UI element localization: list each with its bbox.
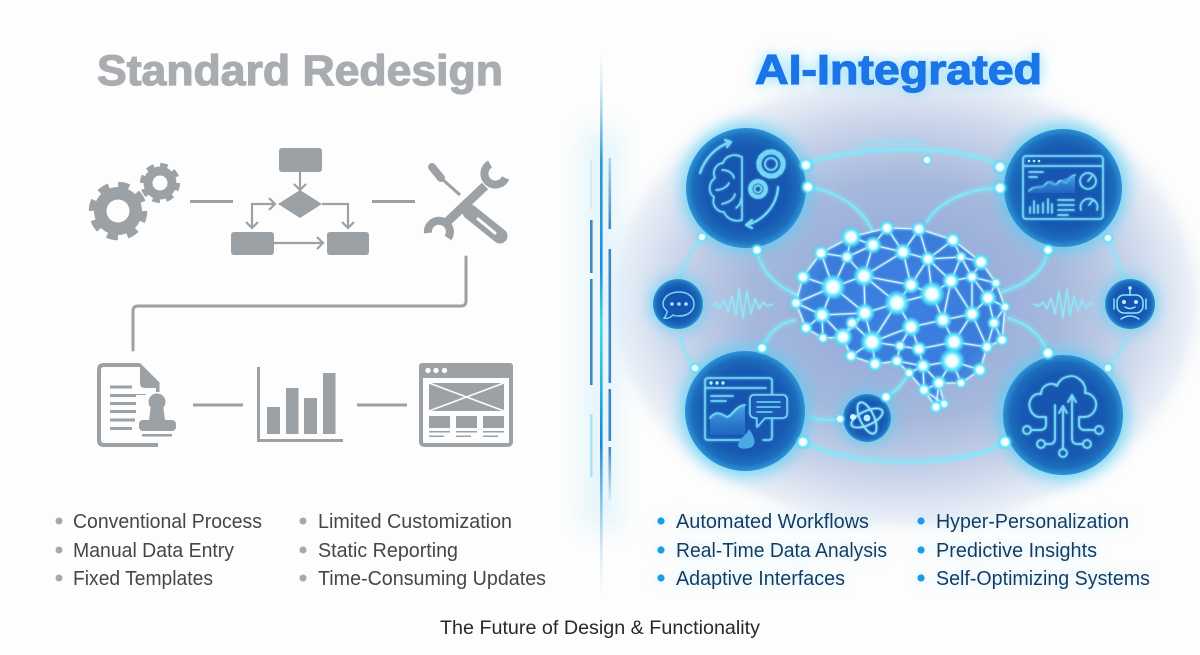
list: AI-integrated traits: Self-Optimizing Systems	[936, 568, 1150, 590]
list: AI-integrated traits: Predictive Insights	[936, 540, 1097, 562]
connector: document to bar chart	[193, 404, 243, 406]
connector: flowchart to tools	[372, 200, 415, 203]
connector: tools down to document	[133, 257, 466, 350]
connector: gears to flowchart	[190, 200, 233, 203]
orbit arcs: glowing connections	[680, 142, 1127, 461]
background glow: right panel	[595, 60, 1200, 540]
list: standard redesign traits: Conventional Process	[73, 511, 262, 533]
central glowing divider	[582, 51, 620, 597]
glowing connection points	[689, 154, 1114, 450]
sphere: brain and gears	[682, 124, 810, 252]
list: AI-integrated traits: Automated Workflows	[676, 511, 869, 533]
list: standard redesign traits: Limited Customization	[318, 511, 512, 533]
icon: bar chart	[257, 367, 343, 442]
list: AI-integrated traits: Real-Time Data Analysis	[676, 540, 887, 562]
brain network: central neural brain	[789, 220, 1011, 414]
list: standard redesign traits: Time-Consuming Updates	[318, 568, 546, 590]
sphere: robot	[1102, 276, 1158, 332]
icon: document with stamp	[99, 363, 178, 445]
icon: gears	[92, 166, 178, 237]
connector: bar chart to browser	[357, 404, 407, 406]
list: standard redesign traits: Static Reporting	[318, 540, 458, 562]
list: standard redesign traits: Manual Data Entry	[73, 540, 234, 562]
waveform: right	[1033, 289, 1094, 318]
caption: footer: The Future of Design & Functionality	[440, 617, 760, 639]
list: AI-integrated traits: Hyper-Personalization	[936, 511, 1129, 533]
icon: flowchart	[231, 148, 369, 255]
neural nodes	[789, 220, 1011, 414]
list: standard redesign traits: Fixed Templates	[73, 568, 213, 590]
icon: browser wireframe	[419, 363, 513, 445]
list: standard redesign traits	[56, 511, 546, 590]
title: Standard Redesign: Standard Redesign	[97, 47, 503, 95]
sphere: atom	[839, 390, 895, 446]
icon: wrench and screwdriver	[428, 164, 506, 238]
title: AI-Integrated: AI-Integrated	[755, 46, 1042, 93]
sphere: chat	[650, 276, 706, 332]
sphere: analytics dashboard	[999, 124, 1127, 252]
list: AI-integrated traits: Adaptive Interfaces	[676, 568, 845, 590]
sphere: cloud with circuits	[998, 350, 1128, 480]
sphere: interface with chat bubble	[680, 346, 810, 476]
neural links	[796, 228, 1005, 407]
list: AI-integrated traits	[657, 511, 1150, 590]
waveform: left	[712, 289, 773, 318]
